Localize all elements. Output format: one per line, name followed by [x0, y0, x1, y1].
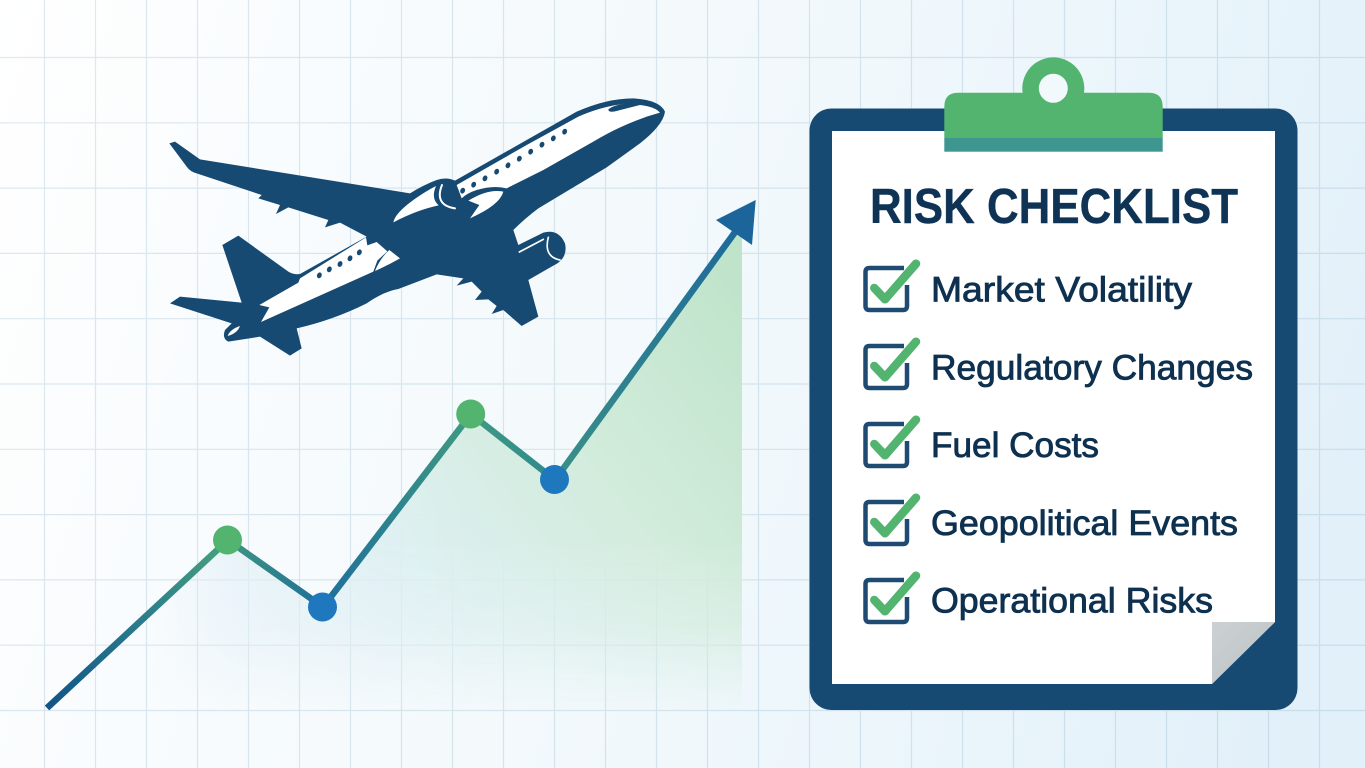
checklist item: Operational Risks: Operational Risks — [931, 582, 1213, 621]
arrow head — [716, 200, 756, 245]
lower wing piece — [375, 250, 400, 271]
lower fuselage band — [259, 237, 387, 322]
upper fuselage window band — [457, 103, 660, 198]
checklist item: Geopolitical Events: Geopolitical Events — [931, 504, 1238, 543]
heading: RISK CHECKLIST — [870, 180, 1238, 234]
tail slit — [228, 326, 240, 336]
clip lower edge — [944, 138, 1163, 152]
lower engine highlight — [519, 239, 543, 252]
checklist item: Market Volatility: Market Volatility — [931, 270, 1193, 310]
wing slat highlight — [468, 191, 503, 218]
data point: blue 2 — [540, 465, 569, 494]
checklist item: Fuel Costs — [866, 420, 1099, 466]
page curl — [1212, 622, 1275, 684]
lower windows — [316, 249, 363, 279]
data point: green 2 — [456, 400, 485, 428]
area fill under growth line — [198, 234, 742, 678]
checklist item: Regulatory Changes — [866, 342, 1253, 388]
panel: clipboard — [810, 57, 1298, 710]
clip hole — [1039, 74, 1068, 103]
lower engine inlet — [547, 237, 560, 260]
clip body — [944, 57, 1163, 138]
line segments — [47, 228, 738, 708]
checklist item: Market Volatility — [866, 264, 1193, 310]
checklist item: Geopolitical Events — [866, 498, 1238, 544]
data point: green 1 — [213, 526, 242, 554]
checklist item: Fuel Costs: Fuel Costs — [931, 426, 1099, 465]
paper sheet — [832, 131, 1275, 684]
data point: blue 1 — [308, 592, 337, 622]
clipboard board — [810, 108, 1298, 710]
checklist item: Operational Risks — [866, 576, 1213, 622]
plane silhouette — [169, 98, 665, 356]
upper windows — [459, 128, 568, 194]
upper engine cowl — [393, 186, 439, 222]
clip — [944, 57, 1163, 152]
growth line chart — [47, 200, 756, 708]
icon: airplane — [169, 98, 665, 356]
upper engine inlet — [440, 185, 455, 208]
checklist item: Regulatory Changes: Regulatory Changes — [931, 348, 1253, 387]
